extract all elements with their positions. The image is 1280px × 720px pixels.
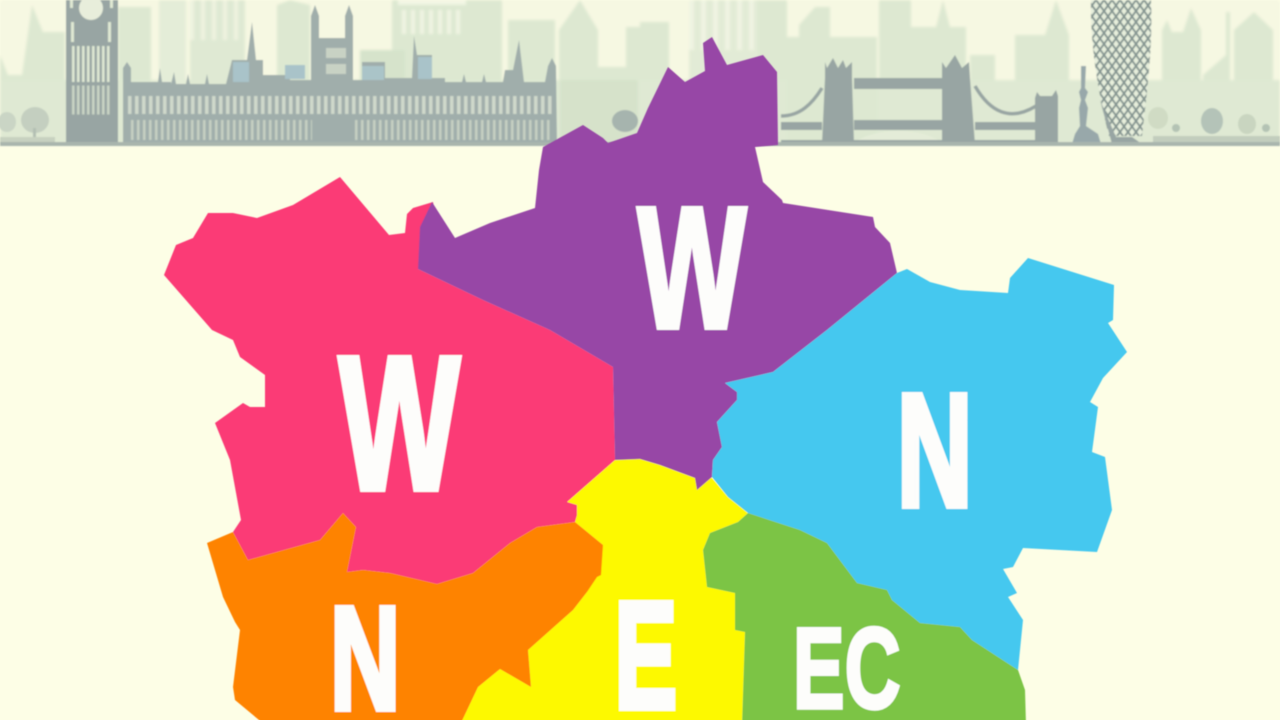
icon: Houses of Parliament xyxy=(123,5,557,144)
region: N (blue) xyxy=(712,258,1127,670)
region: E (yellow) xyxy=(460,459,748,720)
distant city buildings xyxy=(0,0,1280,143)
icon: Big Ben xyxy=(66,0,118,144)
trees and ground xyxy=(0,107,1280,144)
ground line xyxy=(0,142,1280,146)
skyline: London landmarks xyxy=(0,0,1280,146)
region: N (orange) xyxy=(207,513,603,720)
region: EC (green) xyxy=(703,513,1026,720)
icon: Gherkin tower xyxy=(1091,0,1151,144)
map of London postcode areas xyxy=(164,37,1127,720)
icon: Tower Bridge xyxy=(781,55,1058,144)
label: W on purple region: W xyxy=(638,172,747,365)
region: W (pink) xyxy=(164,177,615,584)
label: N on blue region: N xyxy=(897,360,972,540)
region: W (purple) xyxy=(418,37,897,490)
label: W on pink region: W xyxy=(339,318,460,530)
icon: Monument column xyxy=(1072,66,1101,144)
